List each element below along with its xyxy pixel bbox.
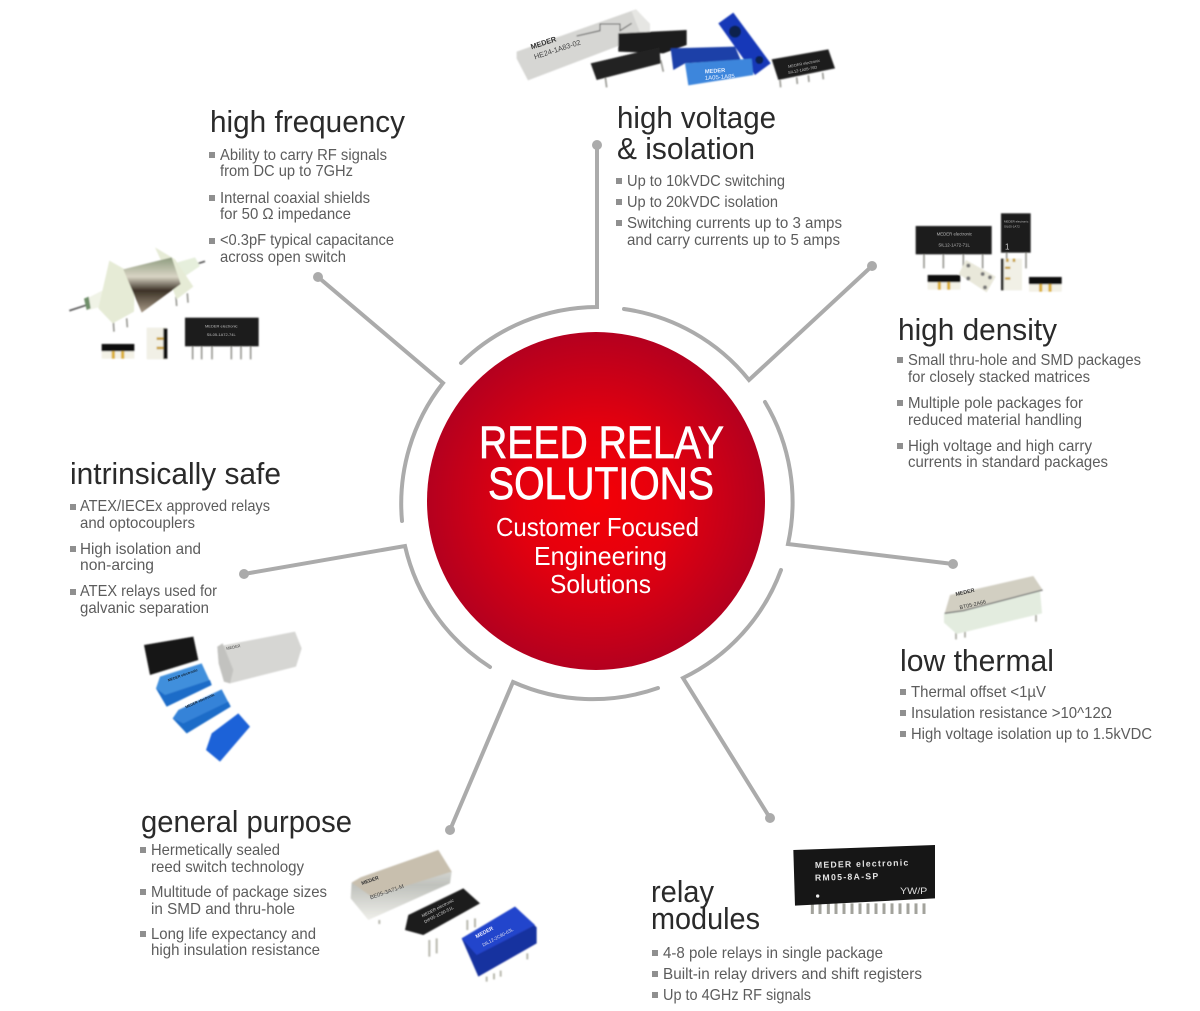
panel: general purpose [140, 804, 352, 959]
connector: intrinsically safe [244, 546, 490, 667]
product photo: general purpose relays [351, 850, 537, 982]
heading: & isolation [617, 131, 755, 166]
heading: general purpose [141, 804, 352, 839]
feature list: <0.3pF typical capacitance [220, 232, 394, 249]
product photo: high frequency relays: MEDER electronic [205, 323, 238, 328]
feature list: Switching currents up to 3 amps [627, 215, 842, 232]
product photo: low thermal relay [944, 576, 1043, 639]
connector: low thermal [765, 402, 953, 564]
product photo: high frequency relays [69, 247, 259, 359]
connector: general purpose [450, 682, 658, 830]
product photo: high voltage relays: MEDER electronic [788, 58, 820, 69]
feature list: non-arcing [80, 557, 154, 574]
feature list: Built-in relay drivers and shift registers [663, 966, 922, 983]
product photo: low thermal relay: BT05-2A66 [959, 599, 987, 611]
subtitle [496, 512, 699, 599]
product photo: general purpose relays: DIL12-2C90-63L [481, 927, 515, 948]
heading: relay [651, 874, 714, 909]
product photo: high density relays: SIL05-1A72 [1004, 224, 1020, 228]
product photo: general purpose relays: MEDER [475, 926, 495, 940]
feature list: reed switch technology [151, 859, 304, 876]
feature list: currents in standard packages [908, 454, 1108, 471]
product photo: high voltage relays: SIL12-1A85-76D [788, 64, 818, 75]
product photo: relay module: MEDER electronic [815, 858, 909, 870]
product photo: high density relays [916, 213, 1062, 292]
feature list: and carry currents up to 5 amps [627, 232, 840, 249]
feature list [616, 173, 842, 249]
heading: modules [651, 901, 760, 936]
connector ring [244, 145, 953, 830]
connector end dots [239, 140, 958, 835]
feature list: Up to 4GHz RF signals [663, 987, 811, 1004]
feature list: Thermal offset <1µV [911, 684, 1046, 701]
feature list: Insulation resistance >10^12Ω [911, 705, 1112, 722]
product photo: low thermal relay: MEDER [955, 588, 975, 598]
product photo: intrinsically safe relays: MEDER electronic [167, 668, 198, 683]
feature list [897, 352, 1141, 471]
panel: high voltage and isolation [616, 100, 842, 249]
product photo: high density relays: MEDER electronic [937, 231, 973, 236]
connector: relay modules [683, 570, 781, 818]
feature list [70, 498, 270, 617]
feature list: Internal coaxial shields [220, 190, 370, 207]
title: REED RELAY [479, 417, 724, 468]
feature list: galvanic separation [80, 600, 209, 617]
title [479, 417, 724, 509]
feature list: Multitude of package sizes [151, 884, 327, 901]
product photo: intrinsically safe relays [144, 632, 302, 762]
heading: low thermal [900, 643, 1054, 678]
panel: high density [897, 312, 1141, 471]
product photo: relay module: RM05-8A-SP [815, 871, 879, 883]
product photo: high density relays: SIL12-1A72-71L [938, 243, 970, 248]
feature list: for closely stacked matrices [908, 369, 1090, 386]
subtitle: Engineering [534, 541, 667, 571]
feature list: High isolation and [80, 541, 201, 558]
central circle [427, 332, 765, 670]
product photo: high voltage relays: 1A05-1A85 [705, 74, 736, 82]
product photo: intrinsically safe relays: MEDER [226, 643, 241, 651]
feature list: Hermetically sealed [151, 842, 280, 859]
product photo: general purpose relays: BE05-3A71-M [369, 884, 405, 901]
feature list: from DC up to 7GHz [220, 163, 353, 180]
product photo: high density relays: MEDER electronic [1004, 220, 1029, 224]
heading: intrinsically safe [70, 456, 281, 491]
feature list [140, 842, 327, 959]
feature list: ATEX relays used for [80, 583, 218, 600]
feature list [209, 147, 394, 266]
heading: high frequency [210, 104, 405, 139]
product photo: general purpose relays: DIP05-1C90-51L [423, 905, 455, 924]
panel: low thermal [900, 643, 1152, 743]
feature list: high insulation resistance [151, 942, 320, 959]
feature list: ATEX/IECEx approved relays [80, 498, 270, 515]
product photo: relay module: YW/P [900, 886, 927, 896]
product photo: high voltage relays [517, 9, 835, 87]
product photo: high voltage relays: HE24-1A83-02 [533, 38, 582, 61]
connector: high density [624, 266, 872, 380]
panel: relay modules [651, 874, 922, 1004]
feature list: Multiple pole packages for [908, 395, 1084, 412]
connector: high frequency [318, 277, 443, 521]
feature list [900, 684, 1152, 743]
product photo: high voltage relays: MEDER [705, 68, 726, 75]
feature list: High voltage and high carry [908, 438, 1092, 455]
feature list: Long life expectancy and [151, 926, 316, 943]
feature list: 4-8 pole relays in single package [663, 945, 883, 962]
heading: high voltage [617, 100, 776, 135]
product photo: intrinsically safe relays: MEDER electronic [185, 693, 215, 709]
product photo: general purpose relays: MEDER electronic [421, 897, 455, 918]
heading [651, 874, 760, 936]
heading [617, 100, 776, 166]
feature list: Up to 20kVDC isolation [627, 194, 778, 211]
panel: high frequency [209, 104, 405, 266]
subtitle: Solutions [550, 569, 651, 599]
feature list: across open switch [220, 249, 346, 266]
connector: high voltage [461, 145, 597, 363]
feature list: for 50 Ω impedance [220, 206, 351, 223]
feature list [652, 945, 922, 1004]
panel: intrinsically safe [70, 456, 281, 617]
title: SOLUTIONS [488, 458, 714, 509]
feature list: Small thru-hole and SMD packages [908, 352, 1141, 369]
feature list: in SMD and thru-hole [151, 901, 295, 918]
product photo: high voltage relays: MEDER [530, 34, 558, 51]
feature list: reduced material handling [908, 412, 1082, 429]
feature list: and optocouplers [80, 515, 195, 532]
feature list: Ability to carry RF signals [220, 147, 387, 164]
product photo: high density relays: 1 [1005, 242, 1010, 251]
subtitle: Customer Focused [496, 512, 699, 542]
feature list: Up to 10kVDC switching [627, 173, 785, 190]
product photo: high frequency relays: SIL05-1A72-74L [207, 332, 236, 337]
product photo: general purpose relays: MEDER [361, 875, 380, 887]
product photo: relay module [793, 845, 935, 914]
heading: high density [898, 312, 1057, 347]
feature list: High voltage isolation up to 1.5kVDC [911, 726, 1152, 743]
